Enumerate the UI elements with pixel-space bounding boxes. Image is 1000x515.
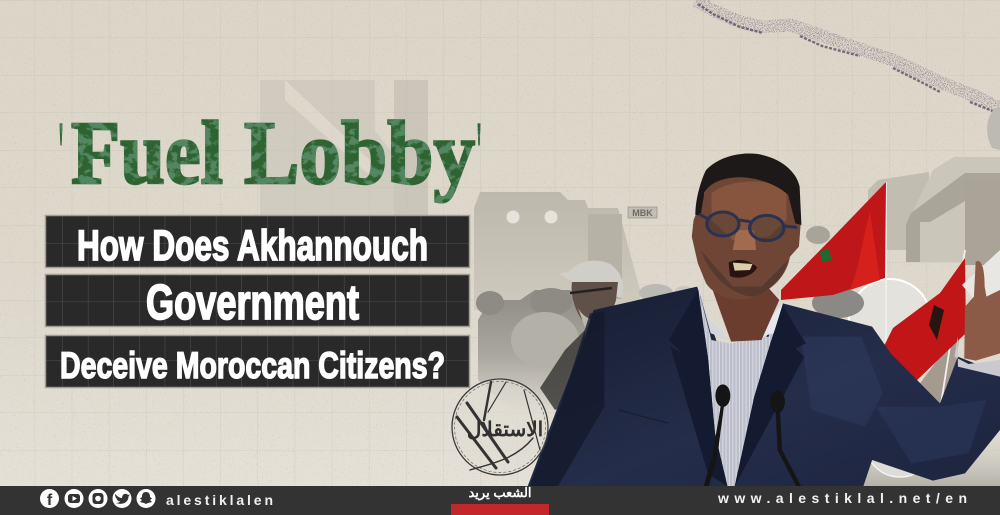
calligraphy logo — [452, 379, 548, 475]
mouth — [729, 260, 757, 278]
flag 1 — [781, 182, 886, 380]
calligraphy logo: الاستقلال — [467, 419, 543, 441]
icon: snapchat — [136, 489, 156, 508]
headline banner 2: Government — [146, 276, 359, 330]
footer bar — [0, 485, 1000, 515]
headline banner 3: Deceive Moroccan Citizens? — [60, 345, 445, 386]
icon: facebook: f — [47, 492, 53, 509]
icon: youtube — [64, 489, 84, 508]
website url: www.alestiklal.net/en — [717, 490, 967, 506]
red tab — [451, 504, 549, 515]
flag 2 — [883, 250, 1000, 404]
building sign — [628, 207, 657, 218]
headline banner 1: How Does Akhannouch — [77, 222, 428, 270]
slogan: الشعب يريد — [468, 485, 532, 501]
title: Lobby — [244, 104, 475, 203]
icon: twitter — [112, 489, 132, 508]
crowd of protesters and riot police — [476, 261, 960, 477]
faint background building — [260, 80, 428, 215]
microphones — [704, 384, 801, 487]
hair — [695, 153, 801, 225]
centre building — [474, 192, 657, 310]
lapels — [669, 290, 806, 487]
social handle: alestiklalen — [166, 492, 273, 508]
social icons — [40, 489, 156, 509]
icon: instagram — [88, 489, 108, 508]
right buildings — [806, 108, 1000, 265]
title: ' — [58, 104, 64, 203]
speckled diagonal band — [695, 0, 1000, 114]
person speaking — [527, 153, 1000, 487]
head — [692, 177, 801, 299]
protester with cap — [559, 261, 623, 328]
glasses — [699, 212, 797, 241]
shirt — [698, 287, 783, 487]
neck — [711, 280, 779, 342]
headline banner 3 — [46, 336, 470, 388]
infographic page: ' — [476, 104, 482, 203]
headline banner 1 — [46, 216, 470, 270]
headline banner 2 — [46, 274, 470, 330]
building sign: MBK — [632, 208, 653, 218]
raised hand — [964, 261, 1000, 361]
title: Fuel — [71, 104, 223, 203]
title — [58, 104, 482, 203]
suit jacket — [527, 287, 1000, 487]
sleeve cuff — [954, 337, 1000, 377]
